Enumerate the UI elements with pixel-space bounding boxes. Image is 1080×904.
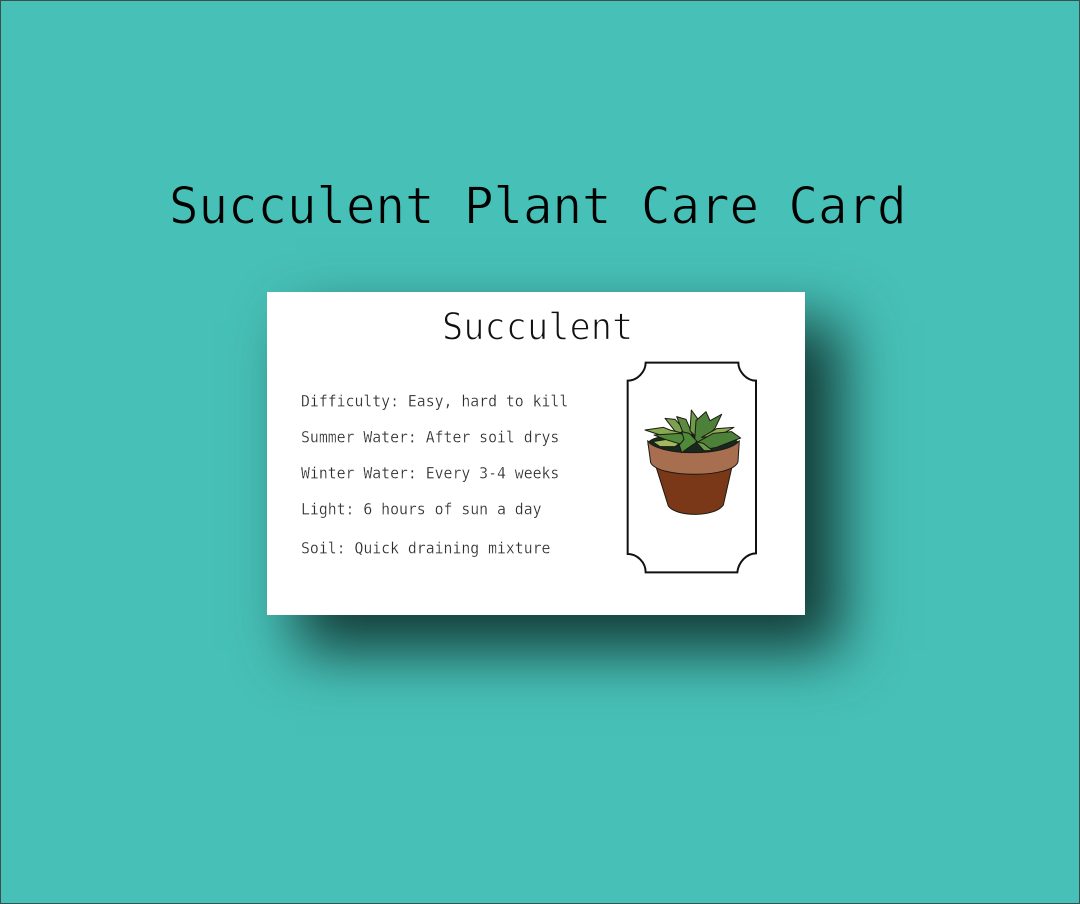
icon: potted succulent [645,410,741,514]
panel: care card [267,292,805,615]
text: soil: Soil: Quick draining mixture [301,539,550,558]
pot body [656,467,732,514]
back leaves [665,418,686,433]
title: Succulent Plant Care Card [169,177,907,236]
text: winter water: Winter Water: Every 3-4 weeks [301,464,559,483]
side leaves [645,427,685,438]
illustration: framed potted succulent [626,362,757,574]
ticket-shaped frame [628,363,756,572]
card heading: Succulent [442,306,633,349]
text: summer water: Summer Water: After soil drys [301,428,559,447]
front leaves [654,433,696,445]
pot rim [648,441,739,474]
crown leaf [695,412,722,444]
text: light: Light: 6 hours of sun a day [301,500,542,519]
text: difficulty: Difficulty: Easy, hard to kill [301,392,568,411]
soil [648,433,739,455]
